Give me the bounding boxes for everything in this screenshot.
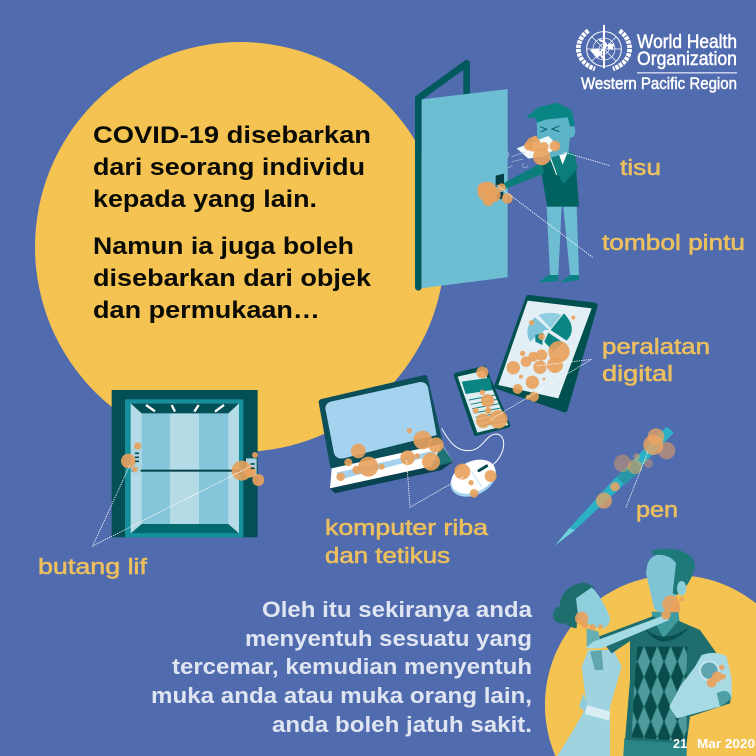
man's hair bbox=[652, 548, 695, 595]
virus on man's face bbox=[661, 595, 684, 620]
man's sweater bbox=[540, 154, 579, 207]
heading text: dan permukaan… bbox=[93, 297, 320, 324]
door handle bbox=[495, 174, 504, 199]
mouse bbox=[445, 453, 502, 504]
pointer line: tisu bbox=[563, 152, 610, 166]
man's head bbox=[646, 554, 677, 613]
heading text: COVID-19 disebarkan bbox=[93, 122, 371, 149]
man's hair bbox=[526, 103, 575, 126]
man's legs bbox=[547, 207, 579, 275]
closing message text bbox=[151, 597, 533, 737]
woman's neck bbox=[587, 628, 602, 648]
dress shadow bbox=[590, 650, 603, 670]
man's bent arm bbox=[548, 151, 578, 184]
illustration: family bbox=[553, 548, 732, 756]
pen bbox=[555, 427, 674, 546]
ceiling with lights bbox=[131, 403, 239, 413]
door frame bbox=[418, 63, 467, 287]
virus on pen bbox=[596, 428, 675, 509]
phone bbox=[456, 368, 508, 434]
pointer lines: digital devices bbox=[490, 359, 592, 420]
floor bbox=[131, 524, 239, 533]
closing message text: menyentuh sesuatu yang bbox=[245, 626, 532, 651]
door panels bbox=[142, 413, 228, 524]
sweater neckline bbox=[643, 627, 690, 642]
virus on phone bbox=[473, 366, 508, 429]
pointer line: pen bbox=[626, 451, 648, 507]
sweater diamond pattern bbox=[632, 647, 687, 742]
label: komputer riba dan tetikus: komputer riba bbox=[325, 515, 489, 540]
label: peralatan digital bbox=[602, 334, 710, 386]
label: komputer riba dan tetikus bbox=[325, 515, 489, 568]
yellow circle behind family bbox=[545, 575, 756, 756]
mouse cable bbox=[442, 428, 504, 465]
virus on door knob bbox=[477, 182, 513, 206]
heading text: kepada yang lain. bbox=[93, 186, 317, 213]
dress sash bbox=[585, 705, 610, 721]
laptop bbox=[322, 378, 453, 493]
WHO logo bbox=[578, 25, 737, 93]
woman's hand bbox=[579, 693, 587, 712]
woman's raised arm bbox=[585, 615, 669, 648]
label: peralatan digital: peralatan bbox=[602, 334, 710, 359]
heading text: dari seorang individu bbox=[93, 154, 365, 181]
virus on woman's face bbox=[575, 612, 603, 631]
baby blanket bbox=[669, 653, 732, 718]
woman's hair bbox=[553, 583, 595, 628]
man's sweater bbox=[625, 619, 732, 743]
date bbox=[673, 737, 755, 751]
label: tombol pintu: tombol pintu bbox=[602, 230, 745, 255]
closing message text: muka anda atau muka orang lain, bbox=[151, 683, 532, 708]
date: Mar 2020 bbox=[697, 737, 755, 751]
door bbox=[422, 89, 508, 288]
man's neck bbox=[652, 612, 680, 643]
handrail bbox=[132, 470, 239, 472]
virus on baby bbox=[707, 665, 726, 688]
WHO logo: Organization bbox=[637, 49, 737, 70]
elevator buttons bbox=[132, 448, 257, 477]
blanket fold bbox=[717, 691, 732, 707]
man's ear bbox=[677, 581, 686, 596]
closing message text: Oleh itu sekiranya anda bbox=[262, 597, 533, 622]
heading text: Namun ia juga boleh bbox=[93, 233, 354, 260]
woman's back arm bbox=[598, 616, 658, 653]
virus on laptop bbox=[336, 428, 444, 481]
virus on tissue bbox=[524, 136, 560, 165]
man's head bbox=[537, 115, 575, 158]
illustration: digital devices and pen bbox=[322, 298, 675, 546]
man's trousers bbox=[623, 738, 687, 756]
man's eyes bbox=[540, 126, 559, 132]
baby face bbox=[700, 661, 719, 680]
WHO logo: World Health bbox=[637, 32, 737, 53]
virus on tablet bbox=[507, 316, 575, 402]
illustration: elevator bbox=[93, 390, 264, 546]
elevator frame bbox=[112, 390, 258, 537]
virus on buttons bbox=[121, 442, 264, 486]
label: butang lif: butang lif bbox=[38, 554, 148, 579]
label: tisu: tisu bbox=[620, 155, 661, 180]
sneeze marks bbox=[507, 152, 528, 168]
icon: WHO emblem bbox=[578, 25, 630, 69]
label: pen: pen bbox=[636, 497, 678, 522]
pointer lines: laptop and mouse bbox=[407, 460, 463, 507]
woman's dress bbox=[557, 650, 622, 756]
closing message text: anda boleh jatuh sakit. bbox=[272, 712, 532, 737]
pointer lines: butang lif bbox=[93, 465, 253, 546]
woman's face bbox=[576, 587, 610, 628]
yellow background circle bbox=[35, 42, 445, 452]
inner frame bbox=[125, 399, 243, 537]
heading text: disebarkan dari objek bbox=[93, 265, 371, 292]
tissue bbox=[517, 136, 559, 159]
closing message text: tercemar, kemudian menyentuh bbox=[172, 654, 532, 679]
pie chart bbox=[527, 313, 572, 352]
heading text bbox=[93, 122, 371, 324]
pointer line: tombol pintu bbox=[497, 185, 593, 257]
date: 21 bbox=[673, 737, 687, 751]
label: komputer riba dan tetikus: dan tetikus bbox=[325, 543, 450, 568]
man's outstretched arm bbox=[503, 163, 544, 189]
illustration: door and sneezing man bbox=[418, 63, 610, 288]
white shirt collar bbox=[550, 153, 567, 175]
label: peralatan digital: digital bbox=[602, 361, 673, 386]
walls bbox=[131, 403, 239, 533]
man's shoes bbox=[538, 275, 579, 283]
virus on mouse bbox=[454, 464, 497, 498]
WHO logo: Western Pacific Region bbox=[581, 74, 737, 93]
tablet bbox=[497, 298, 595, 409]
